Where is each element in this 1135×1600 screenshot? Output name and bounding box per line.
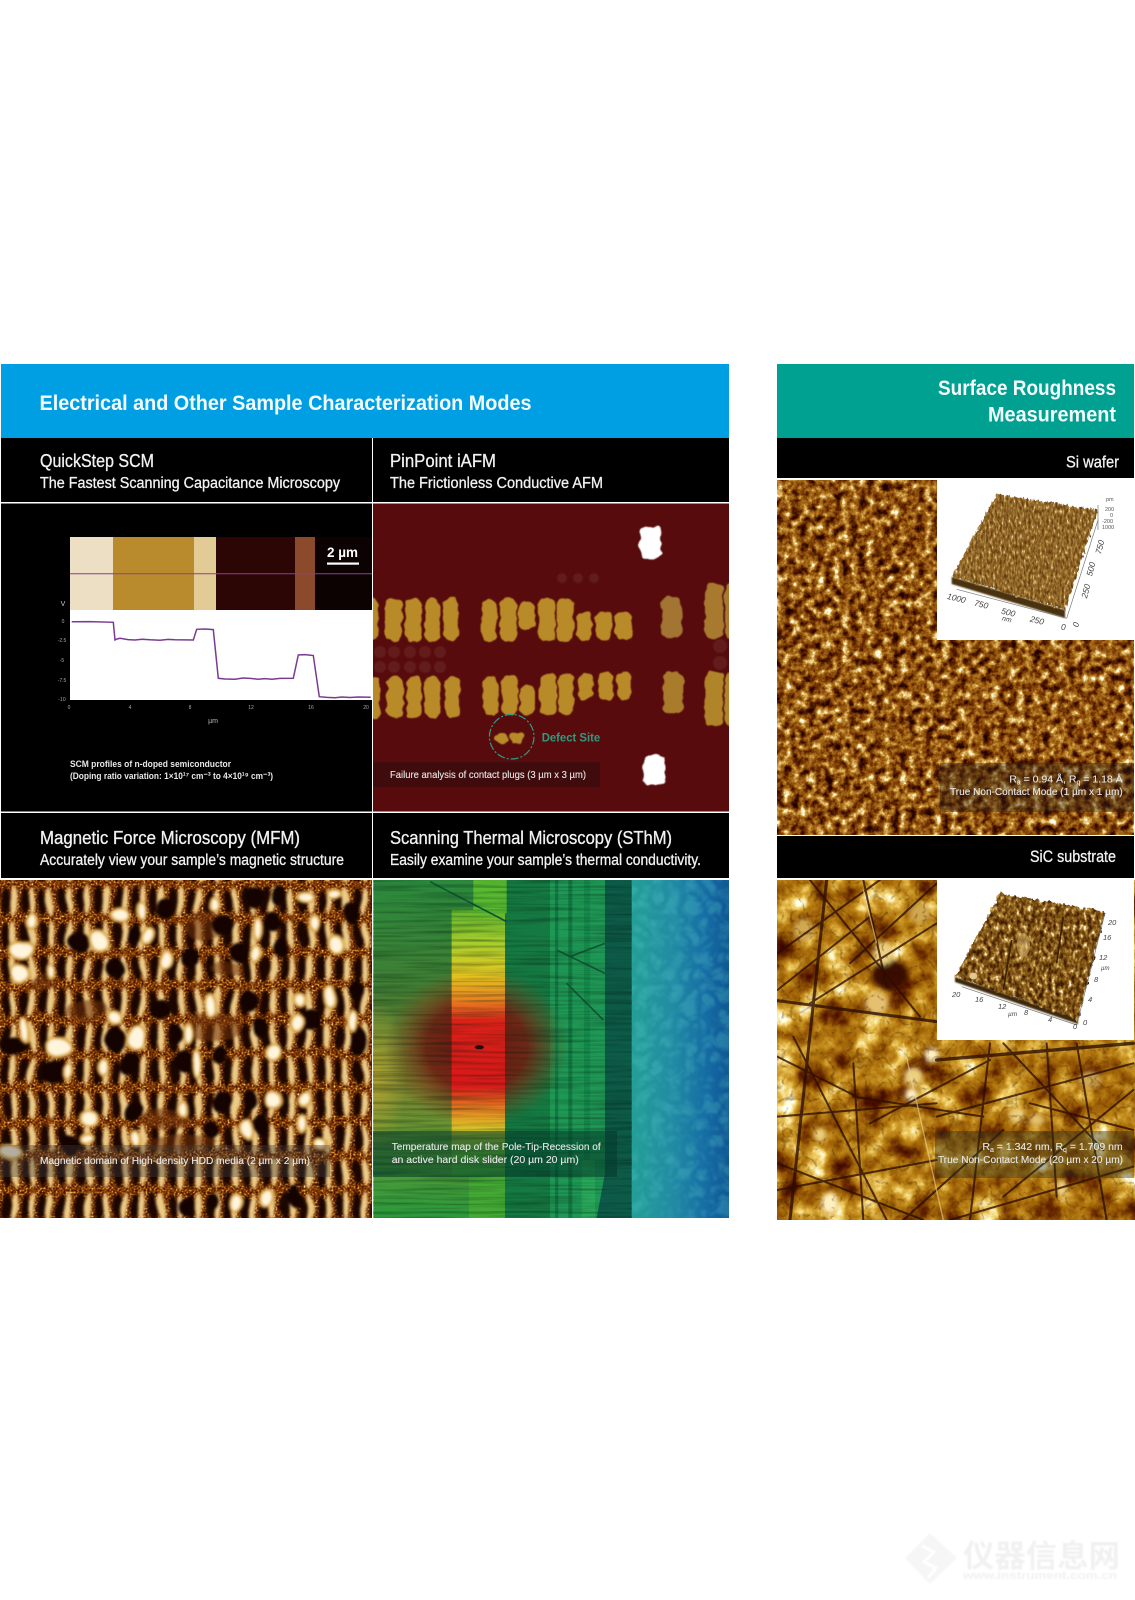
panel: PinPoint contact plugs image [370,504,735,812]
inset: SiC 3D surface: µm [1101,966,1109,972]
caption: failure analysis [373,762,600,787]
line chart: SCM voltage profile: -7.5 [58,678,67,684]
defect site marker: Defect Site [542,731,600,745]
faint ghost plugs [374,573,727,673]
inset: SiC 3D surface: 8 [1094,975,1099,984]
heading: SiC substrate: SiC substrate [1030,848,1116,866]
watermark text: www.instrument.com.cn [962,1570,1117,1582]
inset: SiC 3D surface: 4 [1088,995,1092,1004]
inset: Si wafer 3D surface: 500 [1084,561,1098,577]
heading: Si wafer: Si wafer [1066,454,1119,472]
panel: MFM magnetic domain image [0,874,378,1224]
caption: Si wafer roughness: q [1076,780,1080,787]
caption: SiC roughness: True Non-Contact Mode (20 µm x 20 µm) [938,1154,1123,1166]
caption: SiC roughness: = 1.709 nm [1067,1141,1123,1153]
line chart: SCM voltage profile: 8 [189,705,192,711]
caption: temperature map: Temperature map of the Pole-Tip-Recession of [392,1141,601,1153]
caption: temperature map [373,1131,617,1177]
caption: SiC roughness: q [1063,1147,1067,1154]
title bar: surface roughness: Surface Roughness [938,377,1116,400]
inset: Si wafer 3D surface: 250 [1028,613,1045,627]
inset: Si wafer 3D surface: 1000 [946,591,967,605]
line chart: SCM voltage profile: 20 [363,705,369,711]
image: SiC substrate texture with scratches [777,880,1135,1220]
line chart: SCM voltage profile: -2.5 [58,638,67,644]
defect site marker [489,714,600,759]
heading: Magnetic Force Microscopy: Magnetic Force Microscopy (MFM) [40,827,300,848]
inset: Si wafer 3D surface: 200 [1105,507,1114,513]
caption: Si wafer roughness: = 0.94 Å, R [1021,773,1077,786]
title bar [1,364,729,438]
contact plugs [370,527,735,785]
caption: SCM [70,759,273,782]
caption: Si wafer roughness: a [1017,780,1021,787]
caption: magnetic domain [0,1145,330,1177]
inset: SiC 3D surface: 12 [1099,953,1108,962]
inset: SiC 3D surface: 4 [1048,1015,1052,1024]
heading: Magnetic Force Microscopy [1,813,372,878]
inset: Si wafer 3D surface: 750 [973,598,990,611]
heading: Scanning Thermal Microscopy: Scanning Thermal Microscopy (SThM) [390,827,672,848]
inset: SiC 3D surface: 16 [975,995,984,1004]
heading: PinPoint iAFM: The Frictionless Conductive AFM [390,475,603,492]
caption: Si wafer roughness: R [1009,774,1017,786]
inset: SiC 3D surface: 20 [951,990,961,999]
panel: surface roughness measurement [777,364,1135,1220]
panel: SCM profile [1,504,372,812]
heading: Scanning Thermal Microscopy [373,813,729,878]
caption: temperature map: an active hard disk slider (20 µm 20 µm) [392,1154,579,1166]
caption: SiC roughness [935,1131,1134,1178]
inset: Si wafer 3D surface: -200 [1102,519,1113,525]
inset: Si wafer 3D surface: 1000 [1102,525,1114,531]
inset: Si wafer 3D surface: 500 [1000,606,1017,619]
inset: SiC 3D surface: 0 [1083,1018,1088,1027]
watermark [905,1533,1120,1584]
title bar: surface roughness [777,364,1134,438]
caption: Si wafer roughness: = 1.18 Å [1080,773,1123,786]
inset: SiC 3D surface: 12 [998,1002,1007,1011]
inset: SiC 3D surface: 8 [1024,1008,1029,1017]
caption: SiC roughness: = 1.342 nm, R [994,1141,1063,1153]
caption: SCM: (Doping ratio variation: 1×10¹⁷ cm⁻³ to 4×10¹⁹ cm⁻³) [70,771,273,782]
caption: magnetic domain: Magnetic domain of High-density HDD media (2 µm x 2 µm) [40,1155,310,1167]
watermark text: 仪器信息网 [963,1539,1120,1574]
inset: Si wafer 3D surface: 0 [1061,622,1066,632]
heading: QuickStep SCM: QuickStep SCM [40,450,154,471]
panel: electrical characterization modes [0,364,735,1224]
inset: SiC 3D surface: 20 [1107,918,1117,927]
panel: SThM temperature map [347,880,732,1218]
line chart: SCM voltage profile: -10 [58,697,66,703]
line chart: SCM voltage profile: 12 [248,705,254,711]
heading: PinPoint iAFM: PinPoint iAFM [390,450,496,471]
caption: Si wafer roughness [940,763,1134,812]
heading: QuickStep SCM: The Fastest Scanning Capacitance Microscopy [40,475,340,492]
line chart: SCM voltage profile: 0 [62,619,65,625]
line chart: SCM voltage profile: 0 [68,705,71,711]
inset: Si wafer 3D surface [937,480,1134,640]
caption: SCM: SCM profiles of n-doped semiconductor [70,759,231,770]
caption: SiC roughness: a [990,1147,994,1154]
line chart: SCM voltage profile: 4 [129,705,132,711]
inset: Si wafer 3D surface: nm [1001,615,1012,625]
line chart: SCM voltage profile: µm [208,718,218,725]
line chart: SCM voltage profile: 16 [308,705,314,711]
inset: SiC 3D surface: 16 [1103,933,1112,942]
SCM image strip [70,537,372,610]
inset: SiC 3D surface: 0 [1073,1022,1078,1031]
line chart: SCM voltage profile: -5 [60,658,64,664]
title bar: Electrical and Other Sample Characterization Modes [40,392,532,415]
heading: PinPoint iAFM [373,438,729,502]
inset: SiC 3D surface: µm [1008,1011,1018,1018]
inset: Si wafer 3D surface: 0 [1110,513,1113,519]
SCM image strip: 2 µm [327,544,358,560]
caption: SiC roughness: R [982,1141,990,1153]
inset: SiC 3D surface [937,880,1134,1040]
inset: Si wafer 3D surface: 0 [1070,621,1081,628]
caption: failure analysis: Failure analysis of contact plugs (3 µm x 3 µm) [390,769,586,781]
title bar: surface roughness: Measurement [988,404,1116,427]
inset: Si wafer 3D surface: 750 [1093,539,1107,555]
line chart: SCM voltage profile [58,601,372,725]
image: Si wafer texture [777,480,1134,835]
caption: Si wafer roughness: True Non-Contact Mode (1 µm x 1 µm) [950,786,1123,798]
line chart: SCM voltage profile: V [61,601,66,608]
icon: watermark diamond [905,1533,957,1584]
heading: Si wafer [777,438,1134,478]
heading: Magnetic Force Microscopy: Accurately view your sample’s magnetic structure [40,852,344,869]
heading: SiC substrate [777,836,1134,878]
inset: Si wafer 3D surface: pm [1106,497,1114,503]
inset: Si wafer 3D surface: 250 [1079,583,1093,600]
heading: QuickStep SCM [1,438,372,502]
heading: Scanning Thermal Microscopy: Easily examine your sample’s thermal conductivity. [390,852,701,869]
